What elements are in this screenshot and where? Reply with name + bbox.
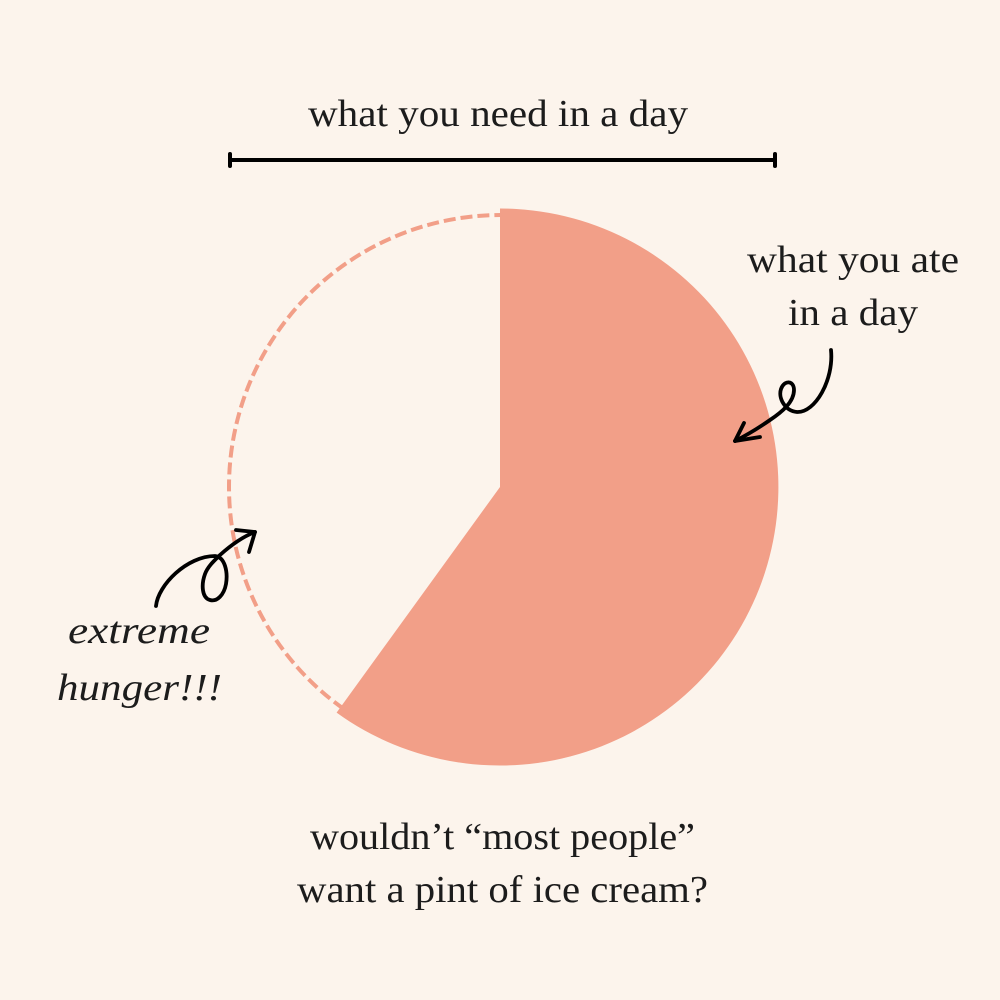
scale bar: daily need xyxy=(230,154,775,166)
label: what you ate in a day: in a day xyxy=(788,292,918,334)
caption: most people question xyxy=(297,816,708,911)
caption: most people question: want a pint of ice cream? xyxy=(297,869,708,911)
arrow: to empty part of circle xyxy=(156,530,255,606)
dashed circle: daily need outline xyxy=(229,215,773,759)
label: extreme hunger xyxy=(57,610,222,709)
label: what you ate in a day: what you ate xyxy=(747,239,959,281)
label: extreme hunger: hunger!!! xyxy=(57,667,222,709)
heading: what you need in a day: what you need in a day xyxy=(308,93,688,135)
label: what you ate in a day xyxy=(747,239,959,334)
arrow: to pie slice xyxy=(735,350,831,441)
pie slice: what you ate xyxy=(337,208,778,765)
caption: most people question: wouldn’t “most people” xyxy=(310,816,695,858)
label: extreme hunger: extreme xyxy=(68,610,210,652)
